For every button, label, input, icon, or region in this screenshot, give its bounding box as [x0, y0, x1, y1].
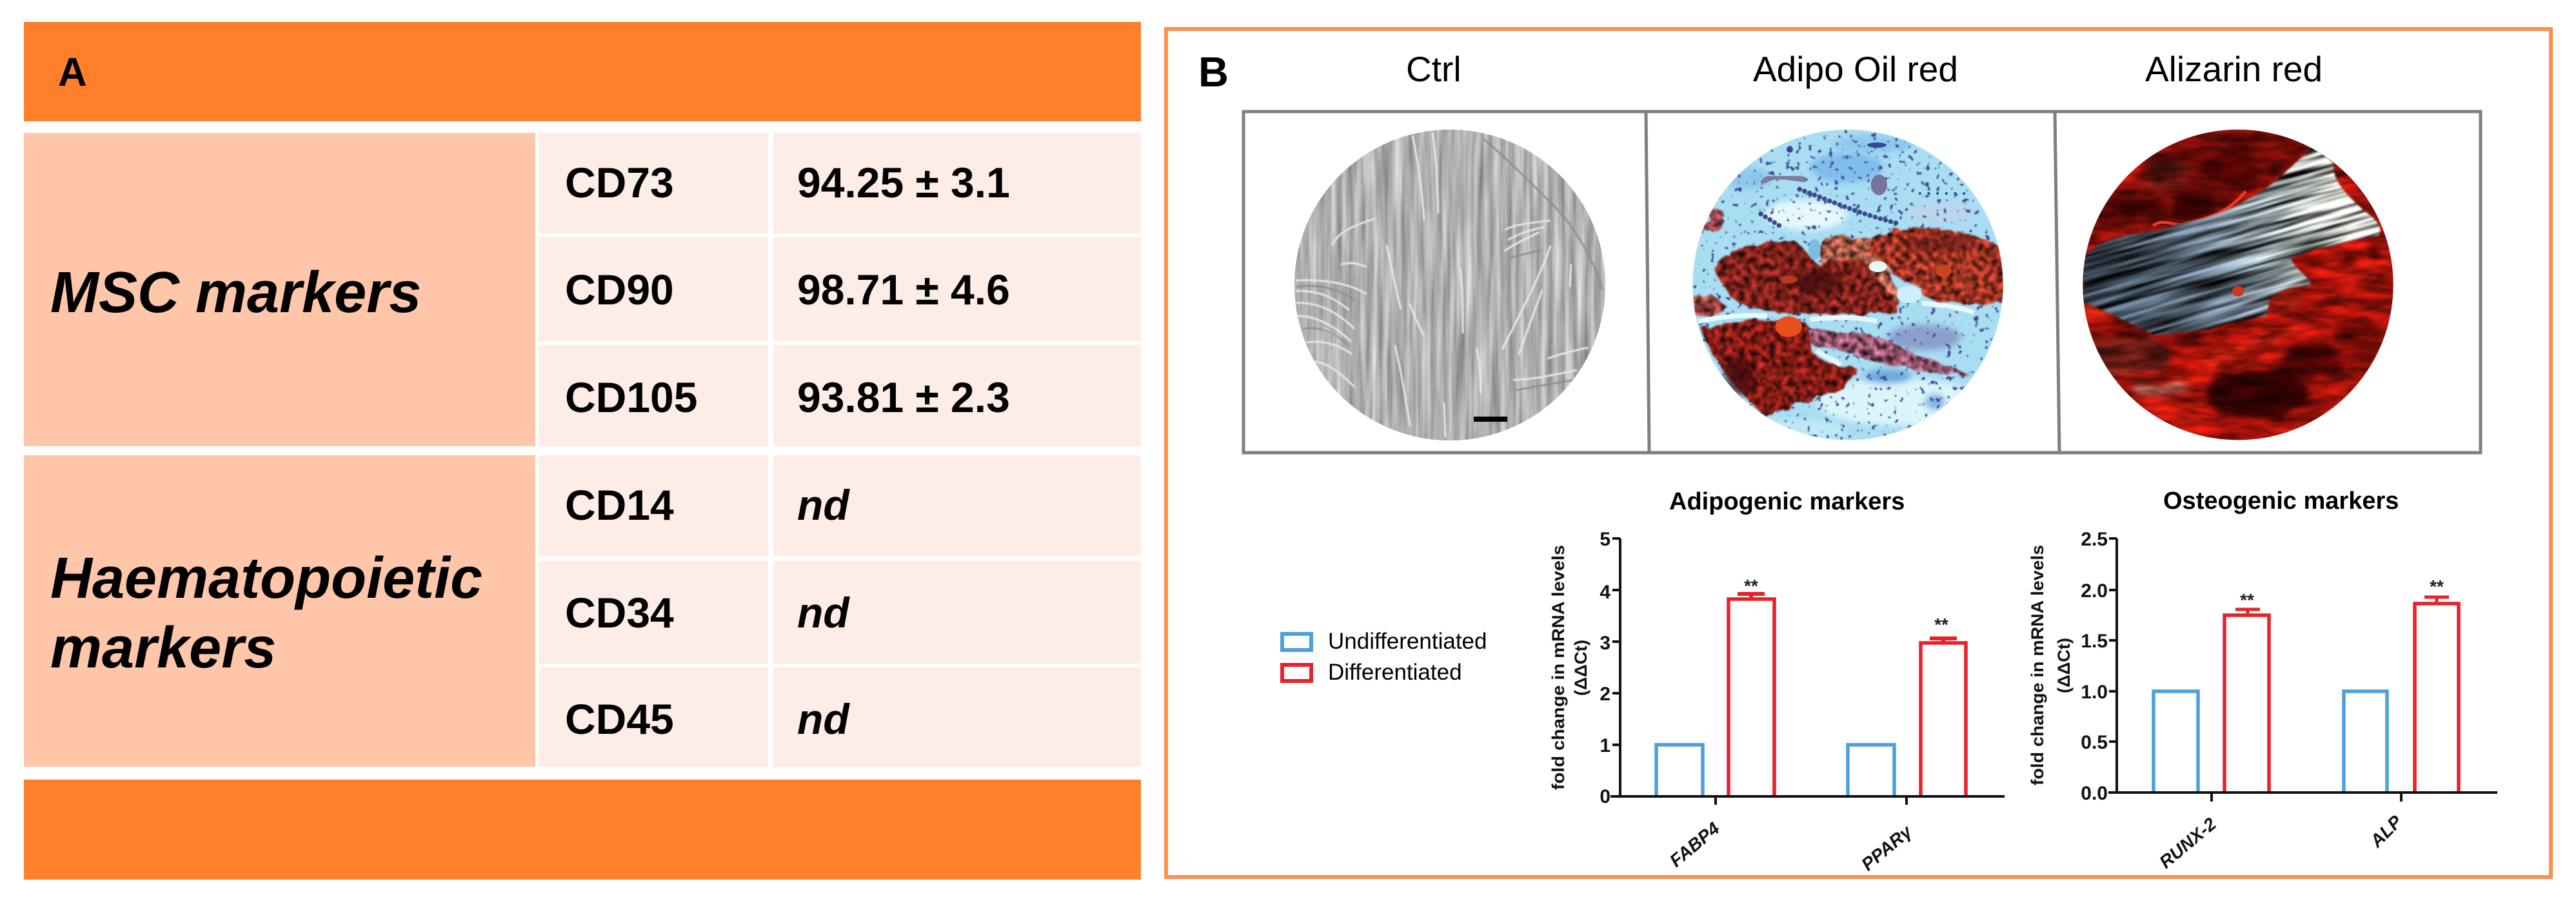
- purple patches: [1763, 177, 1804, 182]
- legend: Undifferentiated: [1328, 629, 1487, 654]
- row: CD34: [539, 561, 1141, 664]
- micrograph: Adipo Oil red stained culture: [1692, 129, 2006, 440]
- y axis label: fold change in mRNA levels: [1549, 545, 1568, 790]
- row: CD105: [539, 345, 1141, 446]
- y tick labels: 3: [1600, 633, 1610, 654]
- row: CD73: 94.25 ± 3.1: [797, 159, 1010, 206]
- bars: RUNX-2: **: [2240, 590, 2254, 610]
- label B: B: [1198, 48, 1229, 95]
- top orange bar with label A: A: [58, 50, 87, 95]
- row: CD73: CD73: [565, 159, 674, 206]
- y tick labels: 0: [1600, 786, 1610, 807]
- heading: Alizarin red: Alizarin red: [2145, 49, 2323, 89]
- row: CD14: [539, 455, 1141, 556]
- y axis label: [1549, 545, 1590, 790]
- row: CD105: CD105: [565, 373, 697, 421]
- bars: FABP4: **: [1744, 576, 1758, 596]
- y tick labels: 5: [1600, 529, 1610, 550]
- micrograph: Ctrl fibroblast culture: [1294, 130, 1606, 441]
- bars: ALP: [2344, 577, 2459, 791]
- bead chains: [1761, 189, 1898, 226]
- white gaps: [1698, 303, 1974, 366]
- y tick labels: 2: [1600, 684, 1610, 705]
- x labels: [2155, 811, 2406, 872]
- heading: Adipo Oil red: Adipo Oil red: [1753, 49, 1958, 89]
- row: CD45: nd: [797, 695, 850, 743]
- row: CD34: CD34: [565, 589, 674, 636]
- y tick labels: 1: [1600, 735, 1610, 756]
- y axis label: [2028, 545, 2074, 785]
- panel A: marker table: [24, 22, 1141, 880]
- panel B: differentiation frame: [1166, 29, 2551, 877]
- chart: Osteogenic markers: [2028, 488, 2497, 872]
- axes: [2108, 538, 2497, 802]
- group cell: Haematopoietic markers: [24, 455, 535, 767]
- row: CD105: 93.81 ± 2.3: [797, 373, 1010, 421]
- y axis label: fold change in mRNA levels: [2028, 545, 2047, 785]
- y tick labels: [2081, 529, 2108, 804]
- grey unstained fibres: [2028, 98, 2453, 457]
- legend: Differentiated: [1328, 660, 1462, 685]
- row: CD73: [539, 133, 1141, 233]
- y tick labels: 2.0: [2081, 580, 2108, 602]
- group cell: Haematopoietic markers: markers: [50, 616, 276, 680]
- row: CD14: nd: [797, 481, 850, 529]
- y tick labels: 1.0: [2081, 682, 2108, 703]
- x labels: FABP4: [1666, 818, 1723, 871]
- axes: [1610, 538, 2005, 805]
- heading: Ctrl: Ctrl: [1406, 49, 1461, 89]
- scale bar: [1474, 417, 1507, 422]
- bars: ALP: **: [2430, 577, 2444, 596]
- x labels: [1666, 818, 1916, 874]
- y tick labels: [1600, 529, 1610, 807]
- y axis label: (ΔΔCt): [2054, 638, 2074, 693]
- row: CD90: [539, 237, 1141, 341]
- chart title: Adipogenic markers: [1669, 488, 1905, 515]
- y axis label: (ΔΔCt): [1571, 640, 1590, 696]
- y tick labels: 2.5: [2081, 529, 2108, 550]
- y tick labels: 0.5: [2081, 732, 2108, 753]
- red mineral deposits: [2074, 123, 2403, 451]
- y tick labels: 0.0: [2081, 783, 2108, 804]
- row: CD34: nd: [797, 589, 850, 636]
- legend: [1282, 629, 1487, 685]
- red lipid clusters: [1693, 208, 2006, 417]
- top orange bar with label A: [24, 22, 1141, 121]
- x labels: ALP: [2366, 811, 2406, 852]
- orange droplets: [1776, 317, 1802, 337]
- dark cores: [1793, 270, 1840, 293]
- group cell: Haematopoietic markers: Haematopoietic: [50, 546, 482, 611]
- panel B border: [1166, 29, 2551, 877]
- bars: FABP4: [1656, 576, 1774, 795]
- bright rim of grey zone: [2153, 192, 2246, 226]
- bars: RUNX-2: [2154, 590, 2269, 791]
- micrograph frame: [1243, 112, 2481, 453]
- row: CD14: CD14: [565, 481, 674, 529]
- x labels: RUNX-2: [2155, 814, 2220, 872]
- group cell: MSC markers: [24, 133, 535, 446]
- bottom orange bar: [24, 780, 1141, 880]
- chart: Adipogenic markers: [1549, 488, 2005, 874]
- row: CD90: CD90: [565, 266, 674, 313]
- bars: PPARγ: **: [1934, 615, 1948, 635]
- y tick labels: 4: [1600, 582, 1610, 603]
- row: CD45: [539, 667, 1141, 767]
- y tick labels: 1.5: [2081, 631, 2108, 652]
- micrograph: Alizarin red stained culture: [2028, 98, 2453, 457]
- row: CD90: 98.71 ± 4.6: [797, 266, 1010, 313]
- x labels: PPARγ: [1858, 821, 1916, 874]
- chart title: Osteogenic markers: [2163, 488, 2399, 515]
- bars: PPARγ: [1848, 615, 1966, 795]
- group cell: MSC markers: MSC markers: [50, 261, 421, 325]
- row: CD45: CD45: [565, 695, 674, 743]
